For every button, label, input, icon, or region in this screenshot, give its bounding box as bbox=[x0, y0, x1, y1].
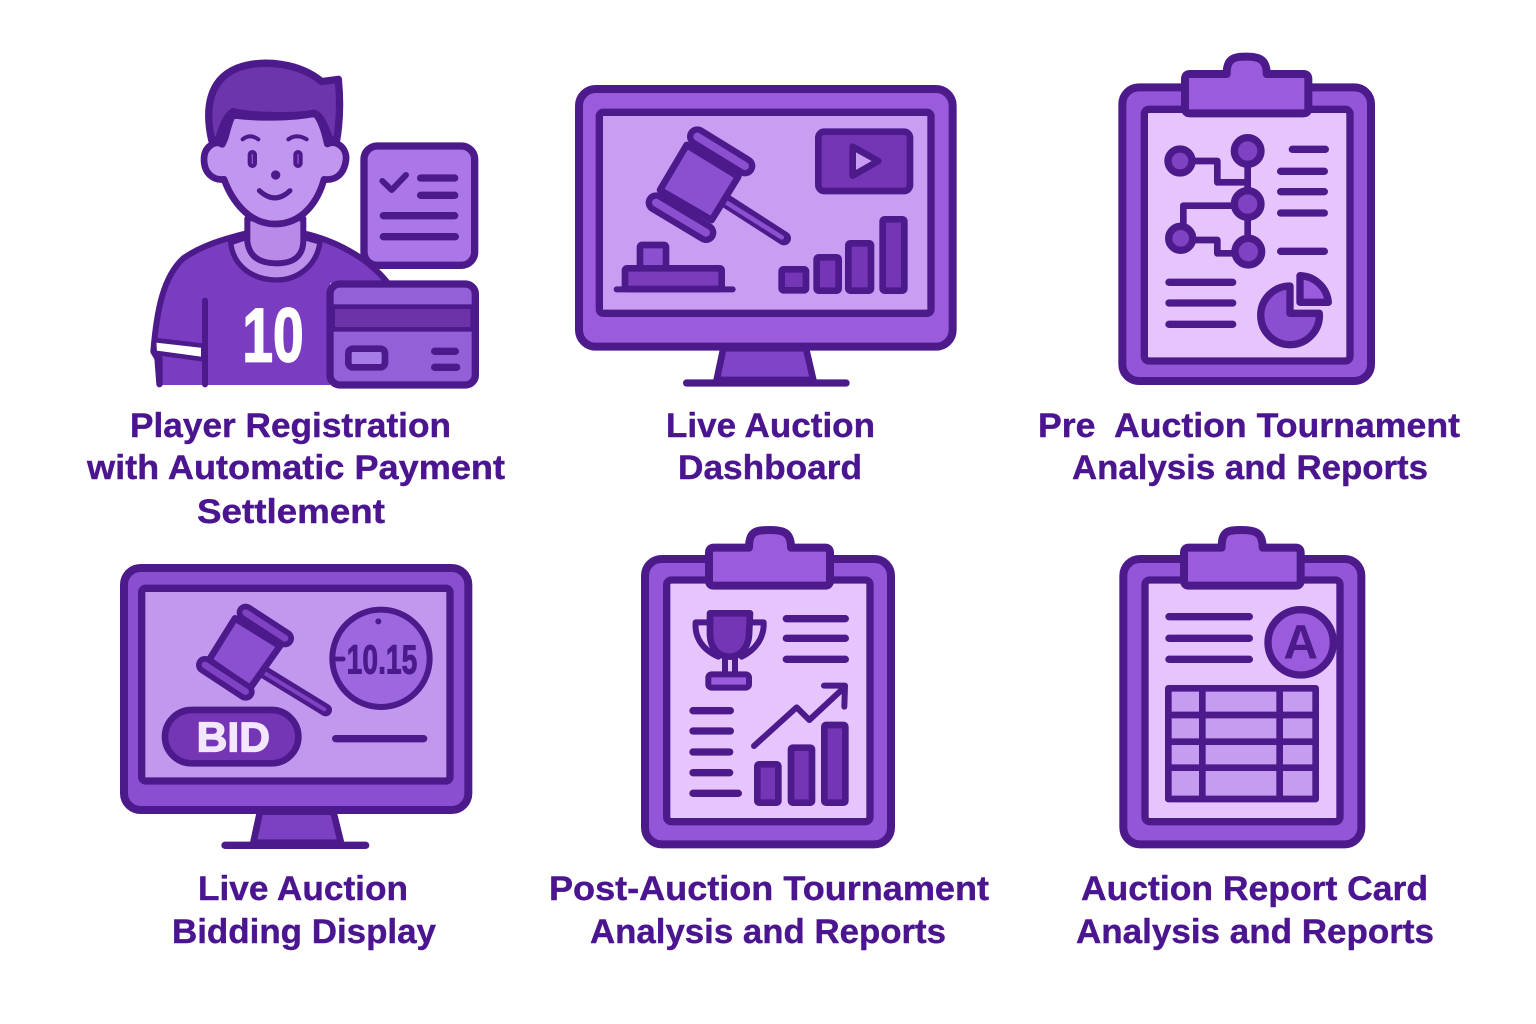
sleeve seam bbox=[196, 301, 214, 384]
label: auction report card: Analysis and Reports bbox=[1076, 913, 1434, 951]
label: player registration: Player Registration bbox=[130, 407, 451, 445]
grade badge bbox=[1268, 610, 1333, 675]
gavel bbox=[205, 613, 326, 710]
label: live auction dashboard bbox=[666, 407, 875, 487]
text lines bbox=[693, 619, 845, 793]
monitor stand bbox=[717, 348, 813, 380]
checklist document bbox=[364, 146, 475, 265]
screen bbox=[142, 588, 450, 781]
countdown clock: 10.15 bbox=[347, 636, 417, 682]
label: post-auction analysis bbox=[549, 870, 989, 951]
icon: live auction dashboard monitor bbox=[579, 89, 953, 383]
sleeve band bbox=[154, 340, 203, 359]
shirt bbox=[153, 233, 387, 385]
monitor base bbox=[225, 834, 366, 856]
label: pre auction analysis bbox=[1038, 407, 1460, 487]
trophy bbox=[696, 613, 764, 688]
shirt collar bbox=[231, 237, 320, 280]
left eye bbox=[250, 152, 255, 166]
monitor stand bbox=[253, 812, 341, 843]
hair bbox=[209, 63, 340, 140]
clipboard paper bbox=[1145, 580, 1340, 822]
auction block bbox=[617, 245, 733, 289]
text lines bbox=[1169, 617, 1249, 659]
eyebrows bbox=[243, 136, 307, 139]
grade badge: A bbox=[1283, 615, 1318, 669]
label: post-auction analysis: Post-Auction Tournament bbox=[549, 870, 989, 908]
bar chart bbox=[757, 725, 845, 803]
neck bbox=[247, 218, 303, 263]
pie chart bbox=[1261, 276, 1328, 345]
label: live auction dashboard: Dashboard bbox=[678, 449, 862, 487]
jersey number: 10 bbox=[242, 294, 304, 379]
clipboard board bbox=[645, 559, 891, 844]
clipboard board bbox=[1122, 87, 1371, 381]
network links bbox=[1183, 161, 1248, 253]
icon: pre-auction clipboard bbox=[1122, 57, 1371, 381]
video panel bbox=[818, 132, 910, 191]
clipboard clip bbox=[709, 530, 830, 586]
trend arrow bbox=[754, 686, 845, 746]
icon: live bidding display monitor bbox=[124, 568, 468, 845]
label: player registration: Settlement bbox=[197, 493, 385, 531]
bid pill button: BID bbox=[197, 714, 270, 761]
label: player registration bbox=[86, 407, 505, 531]
sleeve edge bbox=[152, 358, 168, 384]
label: pre auction analysis: Pre Auction Tournament bbox=[1038, 407, 1460, 445]
clipboard paper bbox=[1144, 109, 1350, 361]
clipboard board bbox=[1123, 559, 1361, 844]
label: live auction dashboard: Live Auction bbox=[666, 407, 875, 445]
network nodes bbox=[1168, 138, 1262, 265]
payment card bbox=[330, 284, 475, 385]
icon: player with form and payment card bbox=[153, 63, 475, 385]
icon: report card clipboard bbox=[1123, 530, 1361, 844]
label: pre auction analysis: Analysis and Reports bbox=[1072, 449, 1428, 487]
screen bbox=[599, 112, 931, 313]
nose bbox=[271, 170, 280, 180]
monitor base bbox=[687, 372, 846, 394]
label: live auction bidding display bbox=[172, 870, 436, 951]
label: post-auction analysis: Analysis and Reports bbox=[590, 913, 946, 951]
bid pill button bbox=[165, 710, 298, 763]
countdown clock bbox=[332, 610, 430, 707]
label: live auction bidding display: Bidding Display bbox=[172, 913, 436, 951]
smile bbox=[259, 191, 290, 198]
icon: post-auction clipboard bbox=[645, 530, 891, 844]
clipboard clip bbox=[1185, 57, 1308, 113]
right eye bbox=[295, 152, 301, 166]
shirt outline bbox=[153, 233, 387, 384]
status line bbox=[336, 728, 424, 750]
clipboard paper bbox=[667, 580, 870, 822]
gavel bbox=[656, 137, 784, 238]
label: player registration: with Automatic Payment bbox=[86, 449, 505, 487]
score table bbox=[1168, 688, 1316, 799]
label: auction report card bbox=[1076, 870, 1434, 951]
monitor frame bbox=[124, 568, 468, 810]
face bbox=[204, 113, 346, 224]
clipboard clip bbox=[1184, 530, 1301, 586]
label: live auction bidding display: Live Auction bbox=[198, 870, 408, 908]
text lines bbox=[1169, 149, 1325, 324]
monitor frame bbox=[579, 89, 953, 347]
label: auction report card: Auction Report Card bbox=[1081, 870, 1428, 908]
bar chart bbox=[782, 219, 904, 291]
